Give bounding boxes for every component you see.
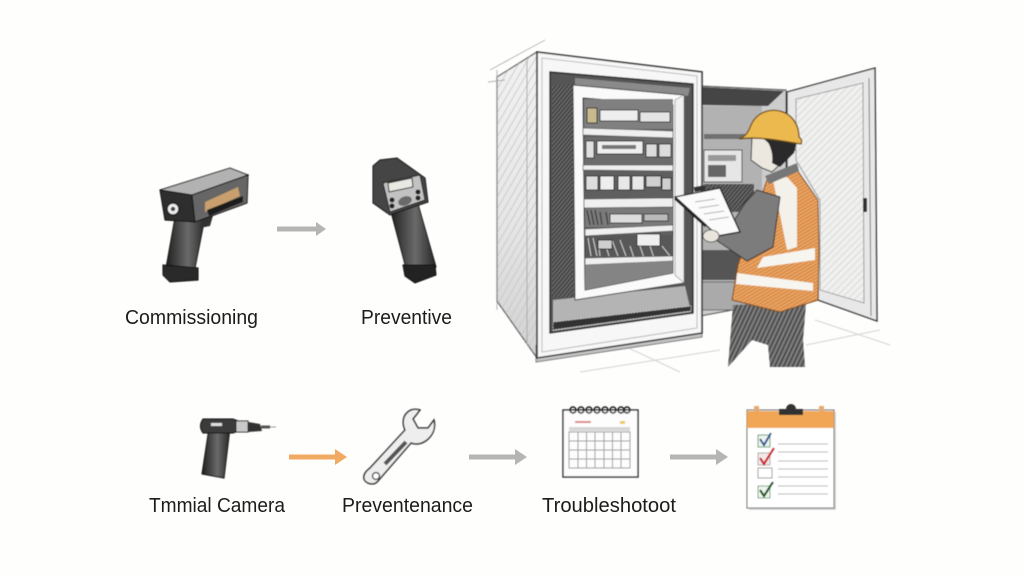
floor lines bbox=[580, 320, 890, 372]
icon: handheld meter front view bbox=[373, 158, 436, 283]
cabinet front frame bbox=[537, 52, 702, 358]
label: Preventenance: Preventenance bbox=[342, 495, 473, 517]
label: Tmmial Camera: Tmmial Camera bbox=[149, 495, 286, 517]
icon: checklist clipboard bbox=[747, 404, 836, 510]
rear cabinet interior bbox=[700, 86, 786, 316]
worker legs bbox=[728, 303, 806, 367]
label: Troubleshotoot: Troubleshotoot bbox=[542, 495, 676, 517]
component row 1 bbox=[584, 99, 673, 129]
icon: infrared thermometer side view bbox=[160, 168, 248, 282]
component row 2 bbox=[584, 137, 673, 166]
cabinet plinth bbox=[536, 322, 702, 362]
arrow: troubleshoot to checklist bbox=[670, 449, 728, 465]
hard hat bbox=[739, 110, 802, 144]
illustration: technician inspecting electrical cabinet bbox=[488, 40, 890, 372]
worker vest bbox=[732, 170, 819, 312]
cabinet door open bbox=[787, 68, 877, 321]
arrow: orange process arrow bbox=[289, 449, 347, 465]
shelves bbox=[583, 128, 673, 265]
clipboard bbox=[675, 185, 740, 242]
component row 5 bbox=[585, 234, 673, 259]
cabinet opening bbox=[550, 72, 693, 333]
arrow: commissioning to preventive bbox=[277, 222, 326, 236]
label: Preventive: Preventive bbox=[361, 307, 452, 329]
component row 4 bbox=[585, 208, 673, 227]
cabinet left side bbox=[488, 40, 545, 358]
icon: drill bbox=[200, 419, 276, 478]
arrow: preventenance to troubleshoot bbox=[469, 449, 527, 465]
label: Commissioning: Commissioning bbox=[125, 307, 258, 329]
icon: wrench bbox=[364, 409, 435, 484]
component row 3 bbox=[584, 170, 673, 199]
icon: calendar bbox=[563, 407, 638, 477]
worker head bbox=[739, 110, 802, 184]
worker arm and sleeve bbox=[713, 190, 780, 261]
equipment panel bbox=[573, 85, 684, 300]
